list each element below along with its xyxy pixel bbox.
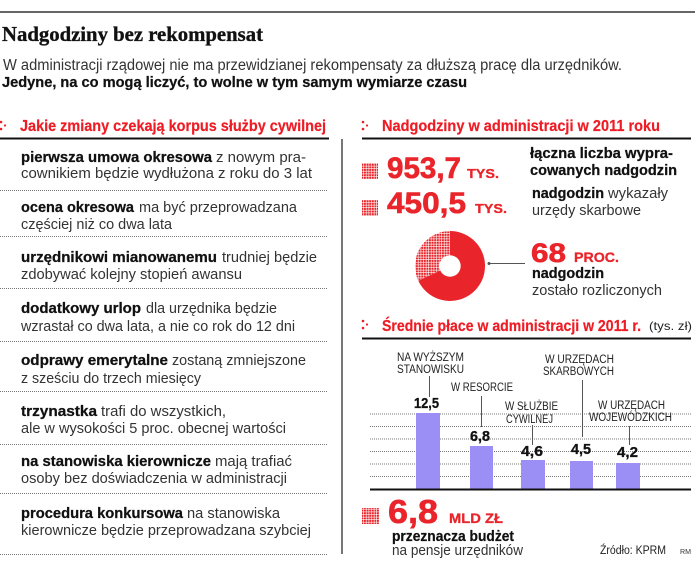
stat: 68 percent: nadgodzin (532, 266, 604, 282)
item 7: mają trafiać (215, 454, 292, 470)
stat: total overtime hours (362, 146, 677, 185)
stat: tax offices overtime: wykazały (607, 186, 669, 202)
heading: salaries: (tys. zł) (649, 319, 692, 333)
intro text: W administracji rządowej nie ma przewidzianej rekompensaty za dłuższą pracę dla urzędników. (3, 57, 622, 74)
bar: tax offices 4,5: 4,5 (571, 441, 591, 458)
item 8 (21, 506, 311, 539)
bar: tax offices 4,5 (543, 354, 614, 489)
heading: overtime: Nadgodziny w administracji w 2011 roku (382, 118, 660, 135)
stat: tax offices overtime (362, 186, 669, 220)
item 3: trudniej będzie (222, 250, 317, 266)
panel: average salaries (362, 317, 692, 559)
item 5: odprawy emerytalne (21, 353, 168, 369)
bar: ministries 6,8: 6,8 (470, 428, 490, 445)
bar: higher positions 12,5 (397, 351, 464, 489)
item 8: procedura konkursowa (21, 506, 184, 522)
item 6: ale w wysokości 5 proc. obecnej wartości (21, 421, 286, 437)
item 3: urzędnikowi mianowanemu (21, 250, 217, 266)
stat: total overtime hours: TYS. (467, 167, 499, 181)
intro text: Jedyne, na co mogą liczyć, to wolne w tym samym wymiarze czasu (2, 74, 467, 91)
arrow: donut to 68 percent (488, 262, 525, 265)
item 4: dla urzędnika będzie (146, 301, 277, 317)
bar: civil service 4,6: CYWILNEJ (506, 414, 553, 426)
item 7 (21, 454, 292, 487)
item 7: na stanowiska kierownicze (21, 454, 211, 470)
stat: tax offices overtime: TYS. (475, 202, 507, 216)
bar: voivodeship offices 4,2: WOJEWÓDZKICH (589, 411, 672, 424)
bar: ministries 6,8: W RESORCIE (451, 382, 513, 394)
stat: tax offices overtime: 450,5 (387, 187, 466, 220)
item 6: trafi do wszystkich, (101, 404, 226, 420)
item 1: pierwsza umowa okresowa (21, 150, 213, 166)
item 4 (20, 301, 295, 335)
panel: overtime in 2011 (362, 118, 691, 301)
heading: changes: Jakie zmiany czekają korpus służby cywilnej (20, 118, 326, 135)
item 1: cownikiem będzie wydłużona z roku do 3 lat (21, 166, 312, 182)
item 3: zdobywać kolejny stopień awansu (21, 267, 242, 283)
bar: civil service 4,6 (505, 400, 558, 489)
item 5: z sześciu do trzech miesięcy (21, 371, 202, 387)
stat: 68 percent (531, 238, 662, 299)
stat: 68 percent: 68 (531, 238, 566, 268)
item 5: zostaną zmniejszone (172, 353, 306, 369)
bar: tax offices 4,5: SKARBOWYCH (543, 366, 614, 378)
intro text (2, 57, 622, 91)
bar: tax offices 4,5: W URZĘDACH (545, 354, 614, 366)
stat: 68 percent: zostało rozliczonych (532, 283, 662, 299)
title: Nadgodziny bez rekompensat (2, 22, 263, 46)
panel: changes in the civil service (0, 118, 342, 554)
item 6: trzynastka (21, 404, 98, 420)
bar: civil service 4,6: 4,6 (521, 443, 543, 460)
item 4: wzrastał co dwa lata, a nie co rok do 12 dni (20, 319, 295, 335)
bar: ministries 6,8 (451, 382, 513, 489)
stat: salary budget (362, 493, 523, 559)
stat: total overtime hours: 953,7 (387, 152, 461, 185)
item 5 (21, 353, 306, 387)
bar: voivodeship offices 4,2 (589, 400, 672, 489)
item 2 (21, 200, 298, 233)
item 8: na stanowiska (187, 506, 281, 522)
author mark: RM (680, 549, 691, 556)
item 2: częściej niż co dwa lata (21, 217, 173, 233)
stat: salary budget: na pensje urzędników (392, 543, 523, 559)
stat: total overtime hours: cowanych nadgodzin (530, 163, 677, 179)
source: Źródło: KPRM (600, 544, 666, 557)
item 1 (21, 150, 312, 182)
item 2: ma być przeprowadzana (139, 200, 298, 216)
stat: salary budget: przeznacza budżet (392, 529, 514, 545)
item 8: kierownicze będzie przeprowadzana szybciej (21, 523, 311, 539)
bar: voivodeship offices 4,2: 4,2 (617, 444, 638, 461)
stat: salary budget: MLD ZŁ (449, 510, 503, 526)
stat: tax offices overtime: urzędy skarbowe (532, 203, 641, 219)
heading: salaries (362, 317, 692, 338)
donut chart: 68 percent settled (415, 231, 485, 301)
item 7: osoby bez doświadczenia w administracji (21, 471, 287, 487)
bar: higher positions 12,5: 12,5 (414, 395, 439, 412)
bar: higher positions 12,5: NA WYŻSZYM (397, 351, 464, 364)
item 4: dodatkowy urlop (21, 301, 141, 317)
stat: salary budget: 6,8 (388, 493, 438, 530)
stat: 68 percent: PROC. (574, 249, 619, 265)
item 3 (21, 250, 317, 283)
item 1: z nowym pra- (216, 150, 306, 166)
bar: higher positions 12,5: STANOWISKU (397, 364, 464, 376)
stat: total overtime hours: łączna liczba wypra- (530, 146, 673, 162)
item 2: ocena okresowa (21, 200, 135, 216)
stat: tax offices overtime: nadgodzin (532, 186, 604, 202)
bar: voivodeship offices 4,2: W URZĘDACH (598, 400, 665, 412)
item 6 (21, 404, 286, 437)
heading: salaries: Średnie płace w administracji w 2011 r. (382, 317, 641, 335)
bar: civil service 4,6: W SŁUŻBIE (505, 400, 558, 413)
